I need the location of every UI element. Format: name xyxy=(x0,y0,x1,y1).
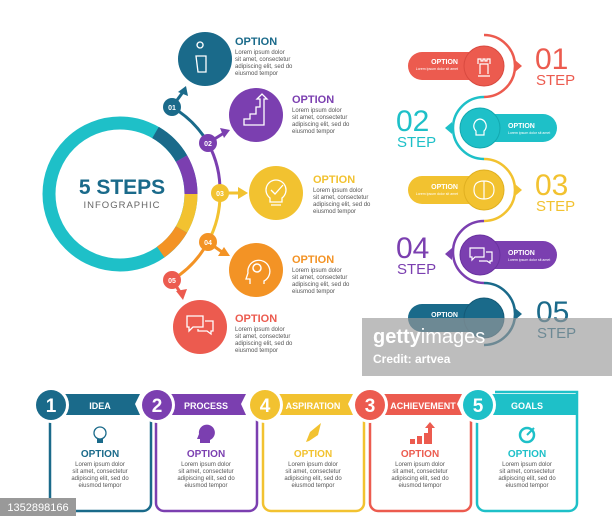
bottom cards xyxy=(33,387,578,511)
step 03 xyxy=(408,159,575,221)
step markers and arrows: 02 xyxy=(204,141,212,148)
card 4 aspiration: ASPIRATION xyxy=(286,401,340,411)
watermark overlay: gettyimages xyxy=(373,326,485,348)
step 04: STEP xyxy=(397,261,436,278)
option circles with text: adipiscing elit, sed do xyxy=(235,64,293,70)
step markers and arrows: 05 xyxy=(168,278,176,285)
card 2 process: OPTION xyxy=(187,449,225,460)
step 02 xyxy=(396,97,557,159)
option circles with text: Lorem ipsum dolor xyxy=(235,50,285,56)
step 05 xyxy=(408,283,576,345)
card 2 process: adipiscing elit, sed do xyxy=(177,476,235,482)
card 5 goals: 5 xyxy=(473,396,484,417)
step 02: STEP xyxy=(397,134,436,151)
step 02: 02 xyxy=(396,105,429,138)
card 4 aspiration: eiusmod tempor xyxy=(291,483,335,489)
card 4 aspiration xyxy=(247,387,364,511)
step 04 xyxy=(396,221,557,283)
option circles with text: Lorem ipsum dolor xyxy=(292,268,342,274)
option circles with text: adipiscing elit, sed do xyxy=(235,341,293,347)
watermark overlay xyxy=(362,318,612,376)
ring: 5 steps xyxy=(49,123,191,265)
card 3 achievement: OPTION xyxy=(401,449,439,460)
step markers and arrows: 01 xyxy=(168,105,176,112)
connector arc xyxy=(172,107,220,280)
ring: 5 steps: 5 STEPS xyxy=(79,176,165,199)
option circles with text: sit amet, consectetur xyxy=(235,334,290,340)
step 05: OPTION xyxy=(431,312,458,319)
option circles with text: adipiscing elit, sed do xyxy=(313,202,371,208)
card 4 aspiration: sit amet, consectetur xyxy=(285,469,341,475)
card 2 process: 2 xyxy=(152,396,162,417)
option circles with text: adipiscing elit, sed do xyxy=(292,282,350,288)
card 3 achievement: adipiscing elit, sed do xyxy=(391,476,449,482)
option circles with text: sit amet, consectetur xyxy=(313,195,368,201)
option circles with text: eiusmod tempor xyxy=(235,71,278,77)
image id label: 1352898166 xyxy=(7,502,69,514)
step markers and arrows: 03 xyxy=(216,191,224,198)
card 4 aspiration: 4 xyxy=(260,396,271,417)
card 5 goals xyxy=(460,387,578,511)
card 2 process: eiusmod tempor xyxy=(184,483,228,489)
step 05: STEP xyxy=(537,325,576,342)
step 04: Lorem ipsum dolor sit amet xyxy=(508,258,550,262)
step 01: STEP xyxy=(536,72,575,89)
step 03: 03 xyxy=(535,169,568,202)
option circles with text: eiusmod tempor xyxy=(313,209,356,215)
option circles with text: sit amet, consectetur xyxy=(292,115,347,121)
step 01: Lorem ipsum dolor sit amet xyxy=(416,67,458,71)
option circles with text: Lorem ipsum dolor xyxy=(235,327,285,333)
card 5 goals: sit amet, consectetur xyxy=(499,469,555,475)
card 5 goals: Lorem ipsum dolor xyxy=(502,462,552,468)
step 01: OPTION xyxy=(431,59,458,66)
option circles with text: OPTION xyxy=(292,254,334,266)
step 01: 01 xyxy=(535,43,568,76)
ring: 5 steps: INFOGRAPHIC xyxy=(84,200,160,211)
card 3 achievement: Lorem ipsum dolor xyxy=(395,462,445,468)
image id label xyxy=(0,498,76,516)
card 2 process: Lorem ipsum dolor xyxy=(181,462,231,468)
step markers and arrows: 04 xyxy=(204,240,212,247)
step 05: 05 xyxy=(536,296,569,329)
card 4 aspiration: OPTION xyxy=(294,449,332,460)
option circles with text: Lorem ipsum dolor xyxy=(313,188,363,194)
option circles with text: OPTION xyxy=(235,36,277,48)
card 1 idea: sit amet, consectetur xyxy=(72,469,128,475)
option circles with text: Lorem ipsum dolor xyxy=(292,108,342,114)
card 1 idea: IDEA xyxy=(89,401,111,411)
step markers and arrows xyxy=(163,86,248,300)
step 03: STEP xyxy=(536,198,575,215)
option circles with text: OPTION xyxy=(292,94,334,106)
card 2 process xyxy=(139,387,257,511)
step 04: 04 xyxy=(396,232,429,265)
card 3 achievement: sit amet, consectetur xyxy=(392,469,448,475)
card 1 idea: eiusmod tempor xyxy=(78,483,122,489)
card 5 goals: eiusmod tempor xyxy=(505,483,549,489)
option circles with text: OPTION xyxy=(235,313,277,325)
card 3 achievement xyxy=(352,387,471,511)
card 3 achievement: ACHIEVEMENT xyxy=(390,401,456,411)
card 5 goals: OPTION xyxy=(508,449,546,460)
card 4 aspiration: Lorem ipsum dolor xyxy=(288,462,338,468)
card 1 idea: OPTION xyxy=(81,449,119,460)
option circles with text: sit amet, consectetur xyxy=(292,275,347,281)
option circles with text: OPTION xyxy=(313,174,355,186)
step 03: Lorem ipsum dolor sit amet xyxy=(416,192,458,196)
card 2 process: sit amet, consectetur xyxy=(178,469,234,475)
step 01 xyxy=(408,35,575,97)
card 3 achievement: 3 xyxy=(365,396,375,417)
option circles with text: adipiscing elit, sed do xyxy=(292,122,350,128)
card 1 idea: 1 xyxy=(46,396,57,417)
option circles with text: eiusmod tempor xyxy=(235,348,278,354)
card 3 achievement: eiusmod tempor xyxy=(398,483,442,489)
step 02: Lorem ipsum dolor sit amet xyxy=(508,131,550,135)
card 2 process: PROCESS xyxy=(184,401,228,411)
card 5 goals: adipiscing elit, sed do xyxy=(498,476,556,482)
step 04: OPTION xyxy=(508,250,535,257)
card 1 idea: adipiscing elit, sed do xyxy=(71,476,129,482)
watermark overlay: Credit: artvea xyxy=(373,352,451,366)
option circles with text xyxy=(173,32,371,354)
card 4 aspiration: adipiscing elit, sed do xyxy=(284,476,342,482)
step 02: OPTION xyxy=(508,123,535,130)
card 1 idea xyxy=(33,387,151,511)
card 1 idea: Lorem ipsum dolor xyxy=(75,462,125,468)
option circles with text: eiusmod tempor xyxy=(292,129,335,135)
step 03: OPTION xyxy=(431,184,458,191)
option circles with text: eiusmod tempor xyxy=(292,289,335,295)
right panel: vertical steps xyxy=(396,35,576,345)
option circles with text: sit amet, consectetur xyxy=(235,57,290,63)
card 5 goals: GOALS xyxy=(511,401,543,411)
